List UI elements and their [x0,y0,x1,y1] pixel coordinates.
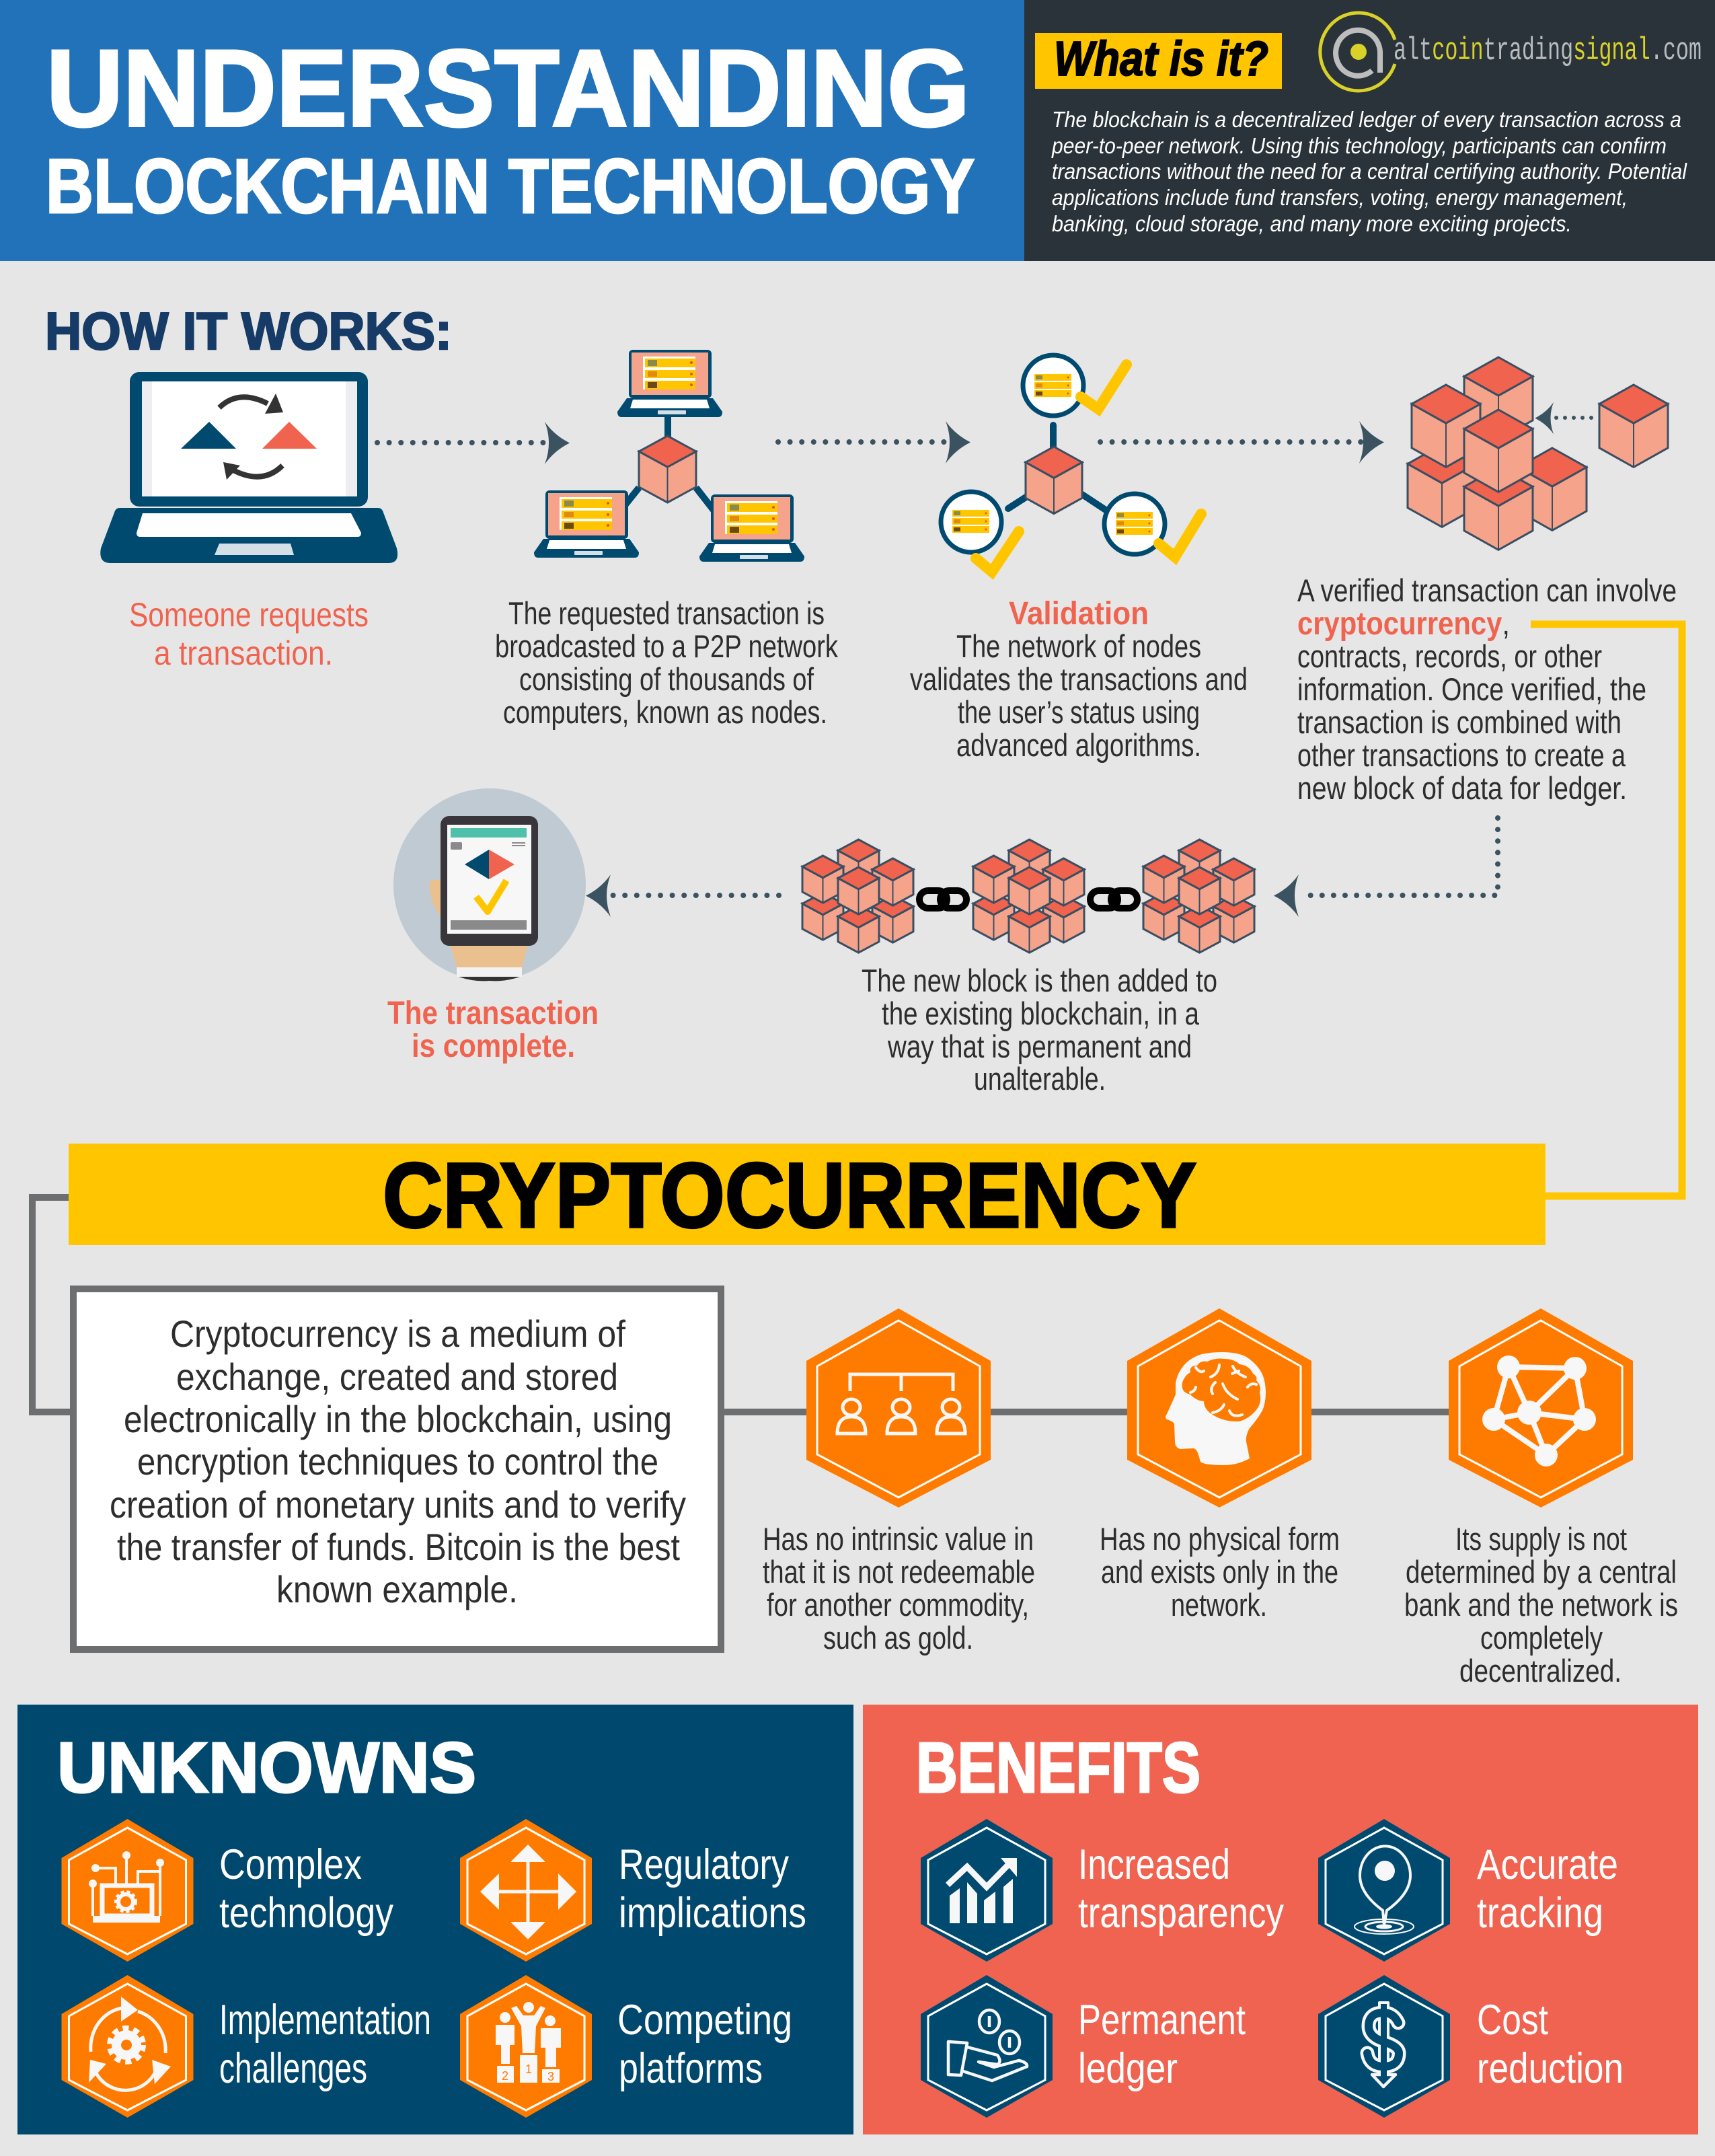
icon: hand with coins [921,1975,1053,2118]
icon: cube stack with new block [1408,357,1668,550]
arrow: step 2 to step 3 [778,421,970,463]
caption: decentralized supply: Its supply is not [1455,1521,1627,1557]
panel: cryptocurrency definition: electronically in the blockchain, using [124,1398,672,1440]
label: accurate tracking: tracking [1477,1890,1603,1937]
label: implementation challenges [219,1997,431,2092]
icon: phone in hand with checkmark [393,788,586,981]
label: increased transparency: transparency [1078,1890,1284,1937]
text: validation: validates the transactions and [910,661,1248,697]
cryptocurrency banner [69,1144,1546,1247]
caption: no intrinsic value: Has no intrinsic value in [763,1521,1034,1557]
text: verified transaction: new block of data for ledger. [1297,770,1627,806]
caption: no physical form: Has no physical form [1100,1521,1340,1557]
text: validation: The network of nodes [956,628,1201,664]
caption: no intrinsic value: for another commodity, [767,1587,1029,1623]
text: verified transaction [1297,572,1677,806]
icon: competing podium: 1 [525,2062,532,2076]
heading: unknowns: UNKNOWNS [57,1728,476,1808]
icon: rising chart [921,1819,1053,1962]
panel: cryptocurrency definition: the transfer of funds. Bitcoin is the best [117,1526,680,1568]
text: verified transaction: information. Once verified, the [1297,671,1646,707]
text: new block added: The new block is then added to [862,963,1217,998]
icon: node validation [941,355,1201,572]
hexagon icon: head with brain [1127,1308,1311,1508]
title line: blockchain technology: BLOCKCHAIN TECHNOLOGY [46,144,975,229]
caption: decentralized supply [1404,1521,1678,1688]
label: regulatory implications [619,1841,806,1937]
text: the transaction is complete: is complete. [412,1029,575,1064]
text: someone requests a transaction: a transaction. [154,634,333,672]
label: cost reduction [1477,1997,1624,2092]
description: peer-to-peer network. Using this technology, participants can confirm [1051,133,1667,158]
arrow: step 3 to step 4 [1100,421,1384,463]
label: implementation challenges: Implementation [219,1997,431,2044]
text: validation: the user’s status using [958,694,1200,730]
text: someone requests a transaction [129,596,369,672]
panel: unknowns [17,1705,853,2134]
arrow: new block down to blockchain [1274,818,1498,917]
text: verified transaction: cryptocurrency, [1297,606,1510,642]
text: validation [910,596,1248,763]
heading: benefits: BENEFITS [916,1728,1200,1808]
text: verified transaction: transaction is combined with [1297,704,1622,740]
panel: cryptocurrency definition: exchange, created and stored [176,1355,618,1398]
connector: banner to definition box [32,1197,71,1412]
panel: cryptocurrency definition: encryption techniques to control the [137,1440,658,1483]
text: verified transaction: contracts, records, or other [1297,638,1602,674]
label: accurate tracking: Accurate [1477,1841,1618,1888]
icon: dollar with down arrow [1318,1975,1450,2118]
caption: no physical form: and exists only in the [1101,1554,1338,1590]
caption: no physical form [1100,1521,1340,1623]
label: competing platforms: Competing [617,1997,792,2044]
panel: cryptocurrency definition: known example. [276,1568,518,1610]
panel: cryptocurrency definition: Cryptocurrency is a medium of [170,1312,625,1355]
caption: no physical form: network. [1171,1587,1267,1623]
text: verified transaction: other transactions to create a [1297,737,1626,773]
text: new block added: way that is permanent and [887,1029,1192,1064]
label: implementation challenges: challenges [219,2045,367,2092]
connector: cryptocurrency to band [1531,624,1682,1196]
text: broadcast to network: consisting of thousands of [519,661,814,697]
panel: cryptocurrency definition: creation of monetary units and to verify [110,1483,686,1526]
text: validation: advanced algorithms. [956,727,1201,763]
icon: competing podium: 2 [502,2069,508,2083]
header: what is it panel [1024,0,1715,261]
description: applications include fund transfers, voting, energy management, [1052,185,1628,210]
label: increased transparency [1078,1841,1284,1937]
icon: competing podium: 3 [547,2070,554,2083]
text: validation: Validation [1009,596,1149,632]
caption: no intrinsic value: that it is not redeemable [763,1554,1035,1590]
hexagon icon: people hierarchy [806,1308,991,1508]
text: new block added: unalterable. [974,1061,1106,1096]
label: cost reduction: reduction [1477,2045,1624,2092]
arrow: blockchain to complete [586,875,779,917]
caption: no intrinsic value [763,1521,1035,1656]
label: complex technology [219,1841,393,1937]
icon: P2P network of laptops [534,350,804,562]
caption: decentralized supply: completely [1480,1620,1603,1656]
cryptocurrency banner: CRYPTOCURRENCY [383,1144,1196,1247]
text: the transaction is complete: The transaction [387,996,599,1031]
text: broadcast to network: The requested transaction is [508,595,825,631]
label: permanent ledger: ledger [1078,2045,1178,2092]
label: increased transparency: Increased [1078,1841,1230,1888]
icon: laptop with exchange arrows [100,372,397,563]
connector: definition box to hexagons [724,1409,1453,1415]
label: regulatory implications: implications [619,1890,806,1937]
title line: understanding: UNDERSTANDING [46,28,970,149]
label: permanent ledger [1078,1997,1246,2092]
icon: complex technology [62,1819,194,1962]
text: new block added [862,963,1217,1096]
text: someone requests a transaction: Someone requests [129,596,369,634]
label: complex technology: Complex [219,1841,362,1888]
heading: how it works: HOW IT WORKS: [45,301,452,361]
description: banking, cloud storage, and many more exciting projects. [1052,211,1572,236]
label: complex technology: technology [219,1890,393,1937]
text: broadcast to network: computers, known as nodes. [503,694,827,730]
label: accurate tracking [1477,1841,1618,1937]
hexagon icon: network nodes [1449,1308,1633,1508]
logo [1320,13,1702,91]
text: the transaction is complete [387,996,599,1064]
label: permanent ledger: Permanent [1078,1997,1246,2044]
icon: regulatory four-way arrow [460,1819,592,1962]
text: new block added: the existing blockchain, in a [882,996,1200,1031]
panel: benefits [863,1705,1698,2134]
text: broadcast to network: broadcasted to a P2P network [495,628,838,664]
icon: competing podium [460,1975,592,2118]
header: title panel [0,0,1024,261]
arrow: step 1 to step 2 [377,422,570,464]
label: competing platforms: platforms [619,2045,763,2092]
icon: implementation cycle with gear [62,1975,194,2118]
caption: decentralized supply: decentralized. [1459,1653,1622,1688]
what is it badge: What is it? [1054,32,1268,86]
caption: no intrinsic value: such as gold. [823,1620,973,1656]
icon: location pin [1318,1819,1450,1962]
label: cost reduction: Cost [1477,1997,1548,2044]
icon: chain of blocks [802,840,1254,953]
label: competing platforms [617,1997,792,2092]
description [1051,107,1688,236]
text: broadcast to network [495,595,838,730]
panel: cryptocurrency definition [73,1289,721,1649]
label: regulatory implications: Regulatory [619,1841,789,1888]
